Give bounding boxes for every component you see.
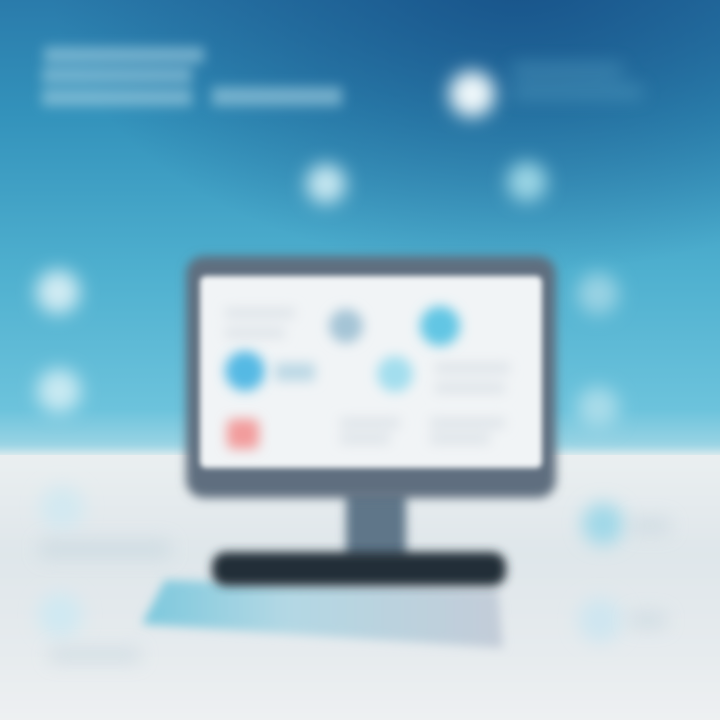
monitor stand: dark base (212, 552, 506, 586)
icon: top bright node (449, 71, 495, 117)
chart: blurred dashboard widgets (225, 306, 510, 449)
icon: red widget (227, 419, 259, 449)
background: blue gradient sky (0, 0, 720, 455)
heading: blurred title block (42, 47, 342, 106)
text block: faint label by top node (512, 64, 642, 98)
panel: monitor screen (200, 276, 542, 468)
text block: faint screen lines (225, 308, 510, 444)
text block: faint floor labels (40, 518, 670, 662)
monitor: bezel (186, 256, 556, 498)
keyboard: pale blue slab (142, 580, 503, 648)
icon: light cyan widget (377, 356, 413, 392)
icon: cyan widget (420, 306, 460, 346)
icon: blue widget (225, 351, 265, 391)
icon: floating nodes (36, 162, 619, 429)
icon: grey-blue widget (329, 309, 363, 343)
icon: floor nodes (38, 486, 624, 642)
background: pale floor (0, 452, 720, 720)
monitor stand: neck (346, 490, 406, 560)
